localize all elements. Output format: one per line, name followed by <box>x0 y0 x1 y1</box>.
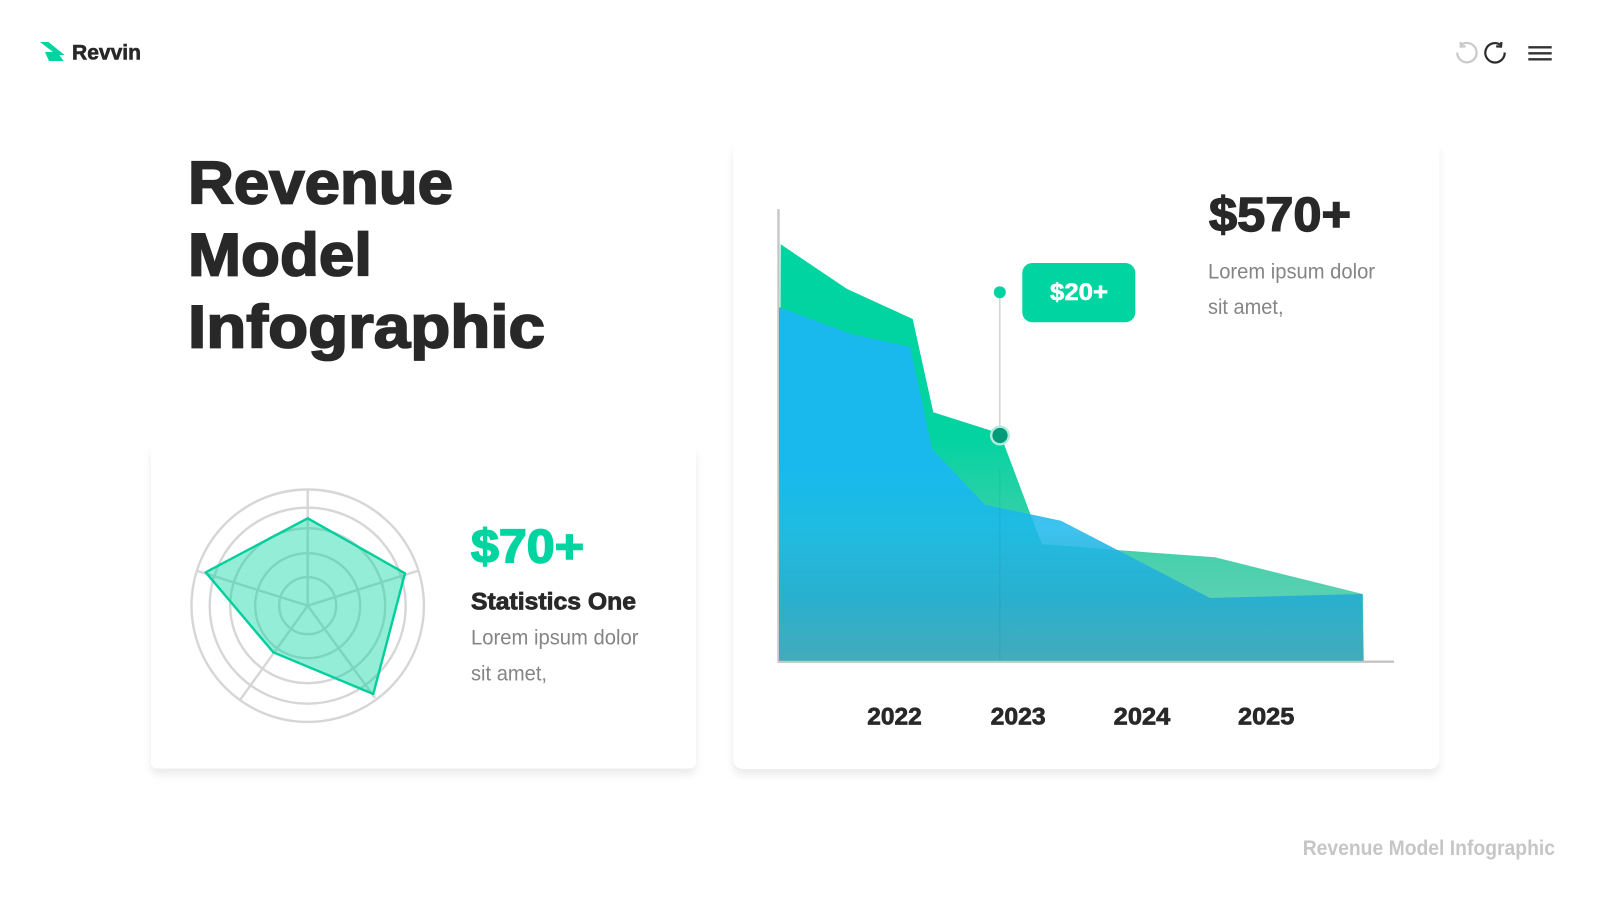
toolbar icons <box>1457 42 1552 62</box>
total description: sit amet, <box>1208 296 1284 319</box>
icon: logo mark <box>40 42 64 61</box>
y axis <box>777 209 780 661</box>
green area series <box>779 244 1364 661</box>
blue area series <box>779 307 1363 661</box>
total description: Lorem ipsum dolor <box>1208 260 1375 283</box>
year labels: 2025 <box>1238 703 1294 730</box>
panel: area chart <box>733 140 1439 769</box>
title: Model <box>188 222 372 289</box>
total description <box>1208 260 1375 319</box>
year labels: 2024 <box>1114 703 1171 730</box>
stat description: Lorem ipsum dolor <box>471 626 639 649</box>
icon: menu <box>1528 47 1552 59</box>
year labels: 2023 <box>991 703 1046 730</box>
title: Infographic <box>188 293 545 360</box>
stat description <box>471 626 639 686</box>
title <box>188 149 545 360</box>
stat heading: Statistics One <box>471 588 636 615</box>
icon: undo <box>1457 42 1477 62</box>
radar data shape <box>206 518 405 694</box>
panel: statistics one <box>151 445 696 768</box>
year labels <box>867 703 1294 730</box>
marker on series <box>990 426 1010 446</box>
year labels: 2022 <box>867 703 922 730</box>
value badge <box>1022 263 1135 322</box>
footer caption: Revenue Model Infographic <box>1303 837 1555 860</box>
stat value: $70+ <box>471 520 584 572</box>
logo <box>40 41 141 64</box>
area chart <box>778 209 1394 730</box>
marker top <box>994 286 1006 298</box>
brand name: Revvin <box>72 41 141 64</box>
card background <box>151 445 696 768</box>
x axis <box>778 661 1394 663</box>
title: Revenue <box>188 149 453 216</box>
total value: $570+ <box>1209 189 1351 242</box>
card background <box>733 140 1439 769</box>
stat description: sit amet, <box>471 663 547 686</box>
value badge: $20+ <box>1050 279 1108 306</box>
radar chart <box>192 490 424 722</box>
icon: redo <box>1485 42 1505 62</box>
guide line <box>999 292 1001 660</box>
